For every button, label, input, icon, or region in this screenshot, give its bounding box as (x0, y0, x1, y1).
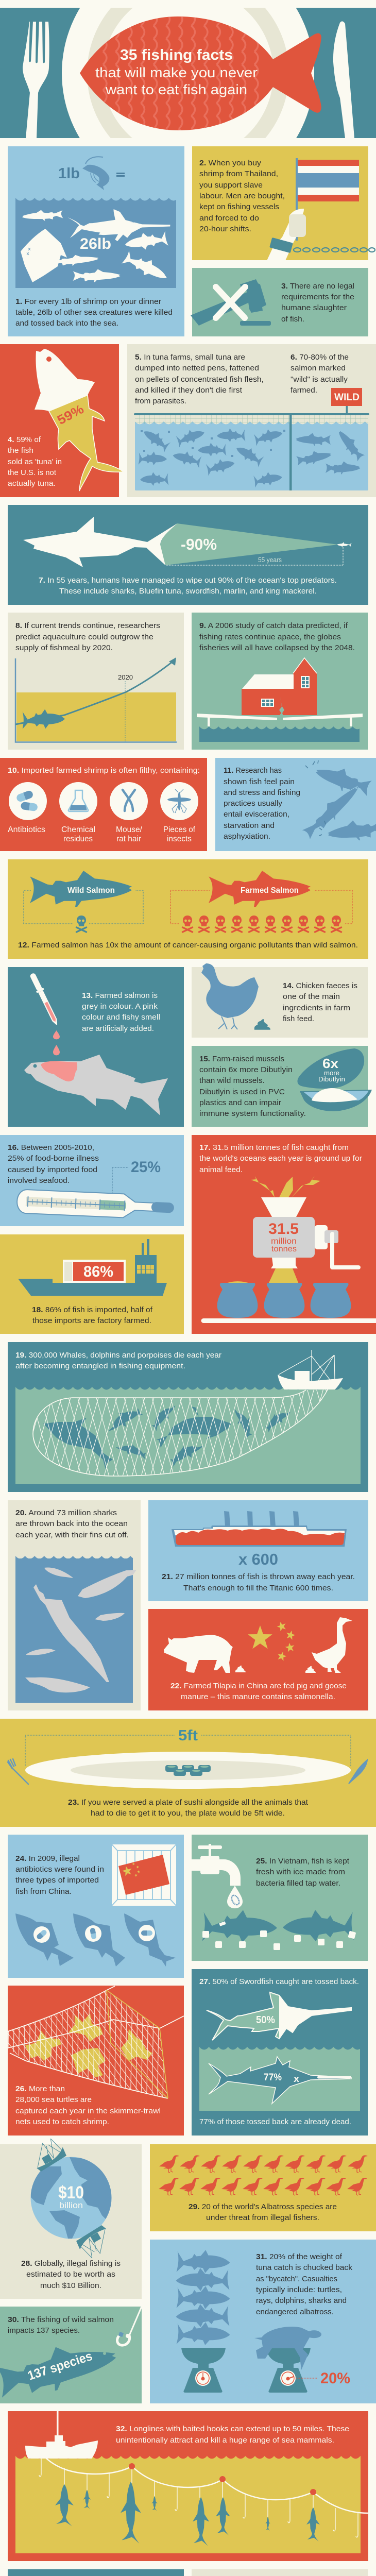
panel: fact 29 albatross (150, 2144, 376, 2231)
text: fact 5: on pellets of concentrated fish flesh, (135, 376, 264, 384)
5ft label: 5ft (178, 1727, 198, 1744)
text: fact 11 (224, 767, 300, 841)
panel: fact 26 sea turtles in nets (8, 1986, 184, 2136)
text: fact 1: and tossed back into the sea. (15, 319, 118, 328)
icon: hair (110, 782, 148, 820)
icon: fish into grinder: 31.5 (268, 1221, 299, 1238)
text: fact 18 (32, 1306, 153, 1325)
text: fact 7 (39, 577, 337, 596)
text: fact 29 (189, 2203, 337, 2222)
salmon with 137 species: 137 species (26, 2349, 94, 2383)
text: fact 19: 19. 300,000 Whales, dolphins and porpoises die each year (15, 1351, 221, 1360)
20 percent callout: 20% (320, 2370, 350, 2387)
icon: dropper (28, 972, 60, 1026)
text: fact 5: 5. In tuna farms, small tuna are (135, 353, 245, 362)
icon: grey salmon with pink patch (24, 1055, 168, 1115)
water box with dead swordfish (199, 2047, 360, 2111)
title text: that will make you never (95, 65, 258, 80)
text: fact 3 (281, 282, 354, 324)
text: fact 4: the fish (8, 447, 33, 455)
WILD sign: WILD (334, 392, 360, 403)
text: fact 6: "wild" is actually (290, 376, 348, 384)
text: fact 27 first line: 27. 50% of Swordfish caught are tossed back. (199, 1978, 359, 1986)
text: fact 15: than wild mussels. (199, 1077, 265, 1085)
text: fact 20: each year, with their fins cut off. (15, 1531, 129, 1539)
text: fact 8: supply of fishmeal by 2020. (15, 644, 113, 652)
labels: contaminants: Antibiotics (8, 825, 45, 834)
text: fact 2: labour. Men are bought, (199, 192, 285, 200)
panel: fact 25 bacteria ice (192, 1835, 368, 1961)
salmon with 137 species (0, 2347, 116, 2398)
icon: pink drops (53, 1030, 60, 1055)
x 600 label: x 600 (238, 1550, 278, 1568)
icon: China stars (248, 1620, 296, 1662)
labels: contaminants: rat hair (116, 835, 141, 843)
icon: fish with pills (15, 1913, 176, 1967)
panel: fact 34 large fish (192, 2569, 368, 2576)
water with 26lb of sea creatures (15, 198, 176, 288)
text: fact 26 (15, 2085, 161, 2126)
panel: fact 12 salmon pollutants (8, 859, 368, 959)
panel: fact 14 chicken faeces (192, 963, 368, 1038)
panel: fact 15 mussels (192, 1046, 372, 1127)
text: fact 17: animal feed. (199, 1166, 243, 1174)
text: fact 2: shrimp from Thailand, (199, 170, 278, 178)
icon: gavel (191, 279, 271, 326)
text: fact 17: the world's oceans each year is ground up for (199, 1155, 362, 1163)
panel: fact 9 fisheries collapse (192, 613, 368, 750)
text: fact 17 (199, 1144, 362, 1174)
icon: droppings right (305, 1666, 316, 1673)
text: fact 14: fish feed. (283, 1015, 314, 1023)
icon: scale left (181, 2348, 226, 2393)
text: fact 29: 29. 20 of the world's Albatross species are (189, 2203, 337, 2211)
text: fact 2: kept on fishing vessels (199, 203, 279, 211)
fish with title (80, 16, 321, 130)
text: fact 4: sold as 'tuna' in (8, 458, 62, 466)
text: fact 23: 23. If you were served a plate of sushi alongside all the animals that (68, 1799, 308, 1807)
icon: turtles (25, 2013, 152, 2077)
text: fact 3: requirements for the (281, 293, 354, 301)
water box with dead swordfish: 77% (264, 2072, 282, 2083)
icon: large shark (23, 517, 177, 567)
20 percent callout (296, 2370, 350, 2387)
icon: goose (312, 1617, 352, 1673)
text: fact 2 (199, 159, 285, 233)
icon: trawl net (8, 1986, 184, 2099)
panel: fact 3 legal requirements (191, 268, 368, 336)
icon: insect (160, 782, 198, 820)
text: fact 16: involved seafood. (8, 1177, 70, 1185)
text: fact 20: 20. Around 73 million sharks (15, 1509, 117, 1517)
text: fact 25: bacteria filled tap water. (256, 1879, 340, 1888)
icon: sacks of feed on shelf (201, 1281, 376, 1323)
text: fact 20: are thrown back into the ocean (15, 1520, 128, 1528)
text: fact 25: 25. In Vietnam, fish is kept (256, 1857, 349, 1866)
icon: fish into grinder: tonnes (271, 1245, 297, 1253)
minus 90 percent label: -90% (181, 535, 217, 553)
text: fact 11: starvation and (224, 822, 275, 830)
icon: caged China flag (112, 1844, 176, 1906)
icon: shrimp (82, 157, 109, 190)
text: fact 13 (82, 992, 160, 1033)
icon: tuna on ice (202, 1910, 356, 1950)
text: fact 31: endangered albatross. (256, 2308, 334, 2316)
panel: fact 31 tuna bycatch scales (150, 2240, 376, 2403)
panel: fact 28 illegal fishing value (0, 2136, 142, 2299)
text: fact 32 (116, 2425, 349, 2445)
water box with dead swordfish: x (294, 2074, 299, 2084)
text: fact 9: 9. A 2006 study of catch data predicted, if (199, 622, 348, 630)
wild salmon with one skull: Wild Salmon (67, 886, 115, 895)
icon: stacked tuna (176, 2250, 230, 2345)
icon: antibiotics (9, 782, 47, 820)
text: fact 9: fisheries will all have collapsed by the 2048. (199, 644, 355, 652)
panel: fact 7 top predators (8, 505, 368, 605)
icon: whales and dolphins (43, 1400, 294, 1469)
text: fact 16: 25% of food-borne illness (8, 1155, 99, 1163)
hooked fish (55, 2482, 320, 2546)
equals sign (116, 173, 125, 177)
fish pens (134, 413, 369, 490)
text: fact 32: unintentionally attract and kill a huge range of sea mammals. (116, 2436, 334, 2445)
text: fact 26: captured each year in the skimmer-trawl (15, 2107, 161, 2115)
panel: fact 11 fish feel pain (215, 758, 376, 851)
text: fact 31: typically include: turtles, (256, 2286, 342, 2294)
text: fact 29: under threat from illegal fishers. (206, 2214, 319, 2222)
longline with hooks (39, 2458, 368, 2537)
icon: fork (8, 1759, 28, 1784)
text: fact 14: one of the main (283, 993, 340, 1001)
text: fact 11: entail evisceration, (224, 810, 289, 819)
text: fact 8 (15, 622, 160, 652)
text: fact 13: 13. Farmed salmon is (82, 992, 158, 1000)
panel: facts 5 and 6 fish farm pens (127, 344, 376, 497)
icon: tiny shark (337, 542, 352, 547)
text: fact 1 (15, 298, 173, 328)
text: fact 26: 26. More than (15, 2085, 65, 2093)
labels: contaminants (8, 825, 196, 843)
text: fact 3: humane slaughter (281, 304, 347, 312)
water with finless sharks (15, 1556, 136, 1703)
farmed salmon with ten skulls (170, 871, 352, 932)
farmed salmon with ten skulls: Farmed Salmon (241, 886, 299, 895)
icon: scale right (266, 2348, 311, 2393)
text: fact 31: rays, dolphins, sharks and (256, 2297, 347, 2305)
text: fact 12: 12. Farmed salmon has 10x the amount of cancer-causing organic pollutants than wild salmon. (18, 941, 358, 950)
text: fact 19 (15, 1351, 221, 1370)
icon: rows of albatross (159, 2155, 368, 2195)
text: fact 15: immune system functionality. (199, 1110, 306, 1118)
icon: mussel (297, 1048, 372, 1111)
text: fact 11: 11. Research has (224, 767, 282, 775)
panel: fact 18 imported fish (0, 1234, 184, 1334)
panel: fact 16 food-borne illness (0, 1135, 184, 1226)
text: fact 2: 20-hour shifts. (199, 225, 251, 233)
icon: turtle (254, 2327, 321, 2370)
panel: fact 8 aquaculture chart (8, 613, 184, 750)
labels: contaminants: Chemical (61, 825, 95, 834)
text: fact 30 (8, 2316, 114, 2335)
55 years dotted bracket: 55 years (258, 556, 282, 564)
icon: Thai flag (296, 158, 359, 241)
icon: hook (117, 2307, 142, 2345)
text: fact 28: much $10 Billion. (40, 2282, 101, 2290)
water (15, 1387, 361, 1484)
text: fact 24: 24. In 2009, illegal (15, 1855, 80, 1863)
text: fact 2: you support slave (199, 181, 263, 190)
icon: fishing boat (278, 1350, 343, 1389)
icon: cracked red house on dock (197, 658, 363, 742)
text: fact 32: 32. Longlines with baited hooks can extend up to 50 miles. These (116, 2425, 349, 2433)
panel: fact 30 wild salmon species (0, 2307, 142, 2403)
icon: globe with boats (31, 2138, 111, 2259)
icon: pig (164, 1635, 233, 1673)
panel: fact 20 finned sharks (8, 1500, 141, 1710)
text: fact 4: the U.S. is not (8, 469, 56, 477)
text: fact 22 (170, 1682, 347, 1701)
text: fact 31: as "bycatch". Casualties (256, 2275, 337, 2283)
icon: chicken (201, 963, 259, 1029)
growth chart: 2020 (118, 673, 133, 681)
text: fact 5: from parasites. (135, 397, 186, 405)
icon: plate with sushi (25, 1752, 351, 1789)
text: fact 25 (256, 1857, 349, 1888)
25 percent label: 25% (131, 1159, 161, 1176)
text: fact 16 (8, 1144, 99, 1185)
panel: fact 17 ground fish (192, 1135, 376, 1334)
text: fact 13: colour and fishy smell (82, 1013, 160, 1022)
text: fact 30: impacts 137 species. (8, 2327, 80, 2335)
floats (129, 2463, 316, 2495)
text: fact 17: 17. 31.5 million tonnes of fish caught from (199, 1144, 349, 1152)
text: fact 22: 22. Farmed Tilapia in China are fed pig and goose (170, 1682, 347, 1690)
text: fact 3: of fish. (281, 315, 304, 324)
icon: cargo ship: 86% (83, 1263, 113, 1280)
text: fact 24: antibiotics were found in (15, 1866, 104, 1874)
water (15, 2456, 361, 2553)
panel: fact 27 swordfish (192, 1969, 368, 2136)
panel: fact 33 sharks vs people (8, 2569, 184, 2576)
text: fact 23 (68, 1799, 308, 1818)
text: fact 28: 28. Globally, illegal fishing is (21, 2260, 121, 2268)
panel: fact 2 slave labour (192, 146, 375, 262)
text: fact 3: 3. There are no legal (281, 282, 354, 291)
text: fact 24 (15, 1855, 104, 1896)
text: fact 5 (135, 353, 264, 405)
panel: fact 13 artificial colour (8, 967, 184, 1127)
text: fact 23: had to die to get it to you, the plate would be 5ft wide. (91, 1809, 285, 1818)
icon: half swordfish: 50% (256, 2014, 275, 2026)
text: fact 30: 30. The fishing of wild salmon (8, 2316, 114, 2324)
text: fact 5: and killed if they don't die first (135, 386, 242, 395)
panel: fact 1 shrimp bycatch (8, 146, 184, 336)
text: fact 6: farmed. (290, 386, 317, 395)
text: fact 6 (290, 353, 349, 395)
title text (95, 47, 258, 97)
text: fact 11: practices usually (224, 800, 283, 808)
panel: fact 23 sushi plate (0, 1719, 376, 1827)
text: fact 27 second line: 77% of those tossed back are already dead. (199, 2118, 351, 2126)
text: fact 20 (15, 1509, 129, 1539)
shrinking wedge (160, 523, 338, 565)
text: fact 31 (256, 2253, 353, 2316)
text: fact 7: 7. In 55 years, humans have managed to wipe out 90% of the ocean's top predators. (39, 577, 337, 585)
text: fact 7: These include sharks, Bluefin tuna, swordfish, marlin, and king mackerel. (59, 587, 317, 596)
text: fact 10: 10. Imported farmed shrimp is often filthy, containing: (8, 767, 200, 775)
text: fact 31: 31. 20% of the weight of (256, 2253, 343, 2261)
icon: mussel: 6x (322, 1056, 339, 1071)
icon: tuna split 59 percent: 59% (55, 402, 86, 428)
text: fact 15 (199, 1055, 306, 1118)
55 years dotted bracket (166, 547, 343, 565)
dotted dimension line (25, 1735, 351, 1766)
text: fact 4: actually tuna. (8, 480, 56, 488)
text: fact 24: three types of imported (15, 1876, 99, 1885)
wild salmon with one skull (24, 871, 143, 932)
text: fact 2: 2. When you buy (199, 159, 262, 167)
text: fact 21 (162, 1573, 355, 1592)
icon: droppings (254, 1019, 270, 1030)
text: fact 16: 16. Between 2005-2010, (8, 1144, 94, 1152)
text: fact 8: predict aquaculture could outgrow the (15, 633, 153, 641)
text: fact 11: shown fish feel pain (224, 778, 295, 786)
26lb label: 26lb (80, 235, 111, 252)
icon: Titanic filled with fish (172, 1511, 347, 1547)
icon: globe with boats: $10 (58, 2183, 84, 2202)
icon: tap with bacteria drop (192, 1844, 243, 1908)
icon: knife (333, 21, 354, 138)
text: fact 19: after becoming entangled in fishing equipment. (15, 1362, 185, 1370)
icon: droppings left (235, 1666, 246, 1672)
icon: cross (216, 287, 245, 318)
text: fact 16: caused by imported food (8, 1166, 97, 1174)
text: fact 28 (21, 2260, 121, 2290)
text: fact 14: ingredients in farm (283, 1004, 350, 1012)
text: fact 18: 18. 86% of fish is imported, half of (32, 1306, 153, 1314)
text: fact 4: 4. 59% of (8, 436, 41, 444)
title text: 35 fishing facts (120, 47, 233, 63)
dotted pointer (112, 1167, 128, 1201)
icon: globe with boats: billion (59, 2200, 83, 2210)
panel: fact 19 whales in nets (8, 1342, 368, 1492)
text: fact 6: 6. 70-80% of the (290, 353, 349, 362)
icon: fork (23, 22, 49, 138)
text: fact 21: 21. 27 million tonnes of fish is thrown away each year. (162, 1573, 355, 1581)
panel: fact 4 tuna mislabel (0, 344, 124, 497)
header panel: plate, fish and title (0, 8, 376, 138)
text: fact 14 (283, 982, 357, 1023)
text: fact 31: tuna catch is chucked back (256, 2264, 353, 2272)
text: fact 11: asphyxiation. (224, 833, 270, 841)
panel: fact 24 illegal antibiotics (8, 1835, 184, 1978)
text: fact 15: 15. Farm-raised mussels (199, 1055, 284, 1063)
text: fact 26: 28,000 sea turtles are (15, 2096, 92, 2104)
text: fact 25: fresh with ice made from (256, 1868, 345, 1876)
labels: contaminants: residues (63, 835, 93, 843)
text: fact 2: and forced to do (199, 214, 259, 223)
icon: cargo ship (18, 1239, 167, 1296)
text: fact 21: That's enough to fill the Titanic 600 times. (183, 1584, 333, 1592)
text: fact 24: fish from China. (15, 1888, 72, 1896)
text: fact 13: grey in colour. A pink (82, 1003, 158, 1011)
icon: fish into grinder: million (271, 1237, 297, 1246)
icon: mussel: Dibutlyin (318, 1075, 345, 1083)
WILD sign (331, 388, 362, 414)
text: fact 18: those imports are factory farmed. (32, 1317, 151, 1325)
text: fact 8: 8. If current trends continue, researchers (15, 622, 160, 630)
icon: chemical flask (59, 782, 97, 820)
icon: longline boat (25, 2411, 98, 2459)
text: fact 28: estimated to be worth as (26, 2270, 115, 2279)
labels: contaminants: Pieces of (163, 825, 196, 834)
icon: tuna split 59 percent (35, 349, 124, 491)
text: fact 1: table, 26lb of other sea creatures were killed (15, 309, 173, 317)
icon: mussel: more (324, 1069, 339, 1077)
icon: fish into grinder (251, 1176, 358, 1284)
icon: fishing net (31, 1388, 330, 1479)
growth chart (15, 657, 177, 742)
icon: half swordfish (207, 1992, 351, 2040)
text: fact 1: 1. For every 1lb of shrimp on your dinner (15, 298, 161, 306)
text: fact 5: dumped into netted pens, fattened (135, 364, 259, 372)
text: fact 26: nets used to catch shrimp. (15, 2118, 109, 2126)
text: fact 15: contain 6x more Dibutlyin (199, 1066, 293, 1074)
text: fact 9: fishing rates continue apace, the globes (199, 633, 341, 641)
text: fact 4 (8, 436, 62, 488)
text: fact 11: and stress and fishing (224, 789, 300, 797)
labels: contaminants: Mouse/ (116, 825, 143, 834)
text: fact 15: plastics and can impair (199, 1099, 281, 1107)
text: fact 13: are artificially added. (82, 1025, 154, 1033)
text: fact 9 (199, 622, 355, 652)
text: fact 15: Dibutlyin is used in PVC (199, 1088, 285, 1096)
panel: fact 22 tilapia manure (148, 1609, 368, 1710)
title text: want to eat fish again (105, 82, 247, 97)
text: fact 14: 14. Chicken faeces is (283, 982, 357, 990)
icon: thermometer (16, 1189, 175, 1220)
panel: fact 32 longlines (8, 2411, 368, 2561)
icon: struggling fish (299, 760, 376, 844)
text: fact 22: manure – this manure contains salmonella. (181, 1693, 335, 1701)
panel: fact 21 thrown away fish (148, 1500, 368, 1601)
icon: chained hand (266, 209, 375, 262)
icon: knife (349, 1760, 367, 1784)
panel: fact 10 filthy shrimp (0, 758, 207, 851)
labels: contaminants: insects (167, 835, 192, 843)
text: fact 6: salmon marked (290, 364, 346, 372)
1lb label: 1lb (58, 165, 80, 182)
